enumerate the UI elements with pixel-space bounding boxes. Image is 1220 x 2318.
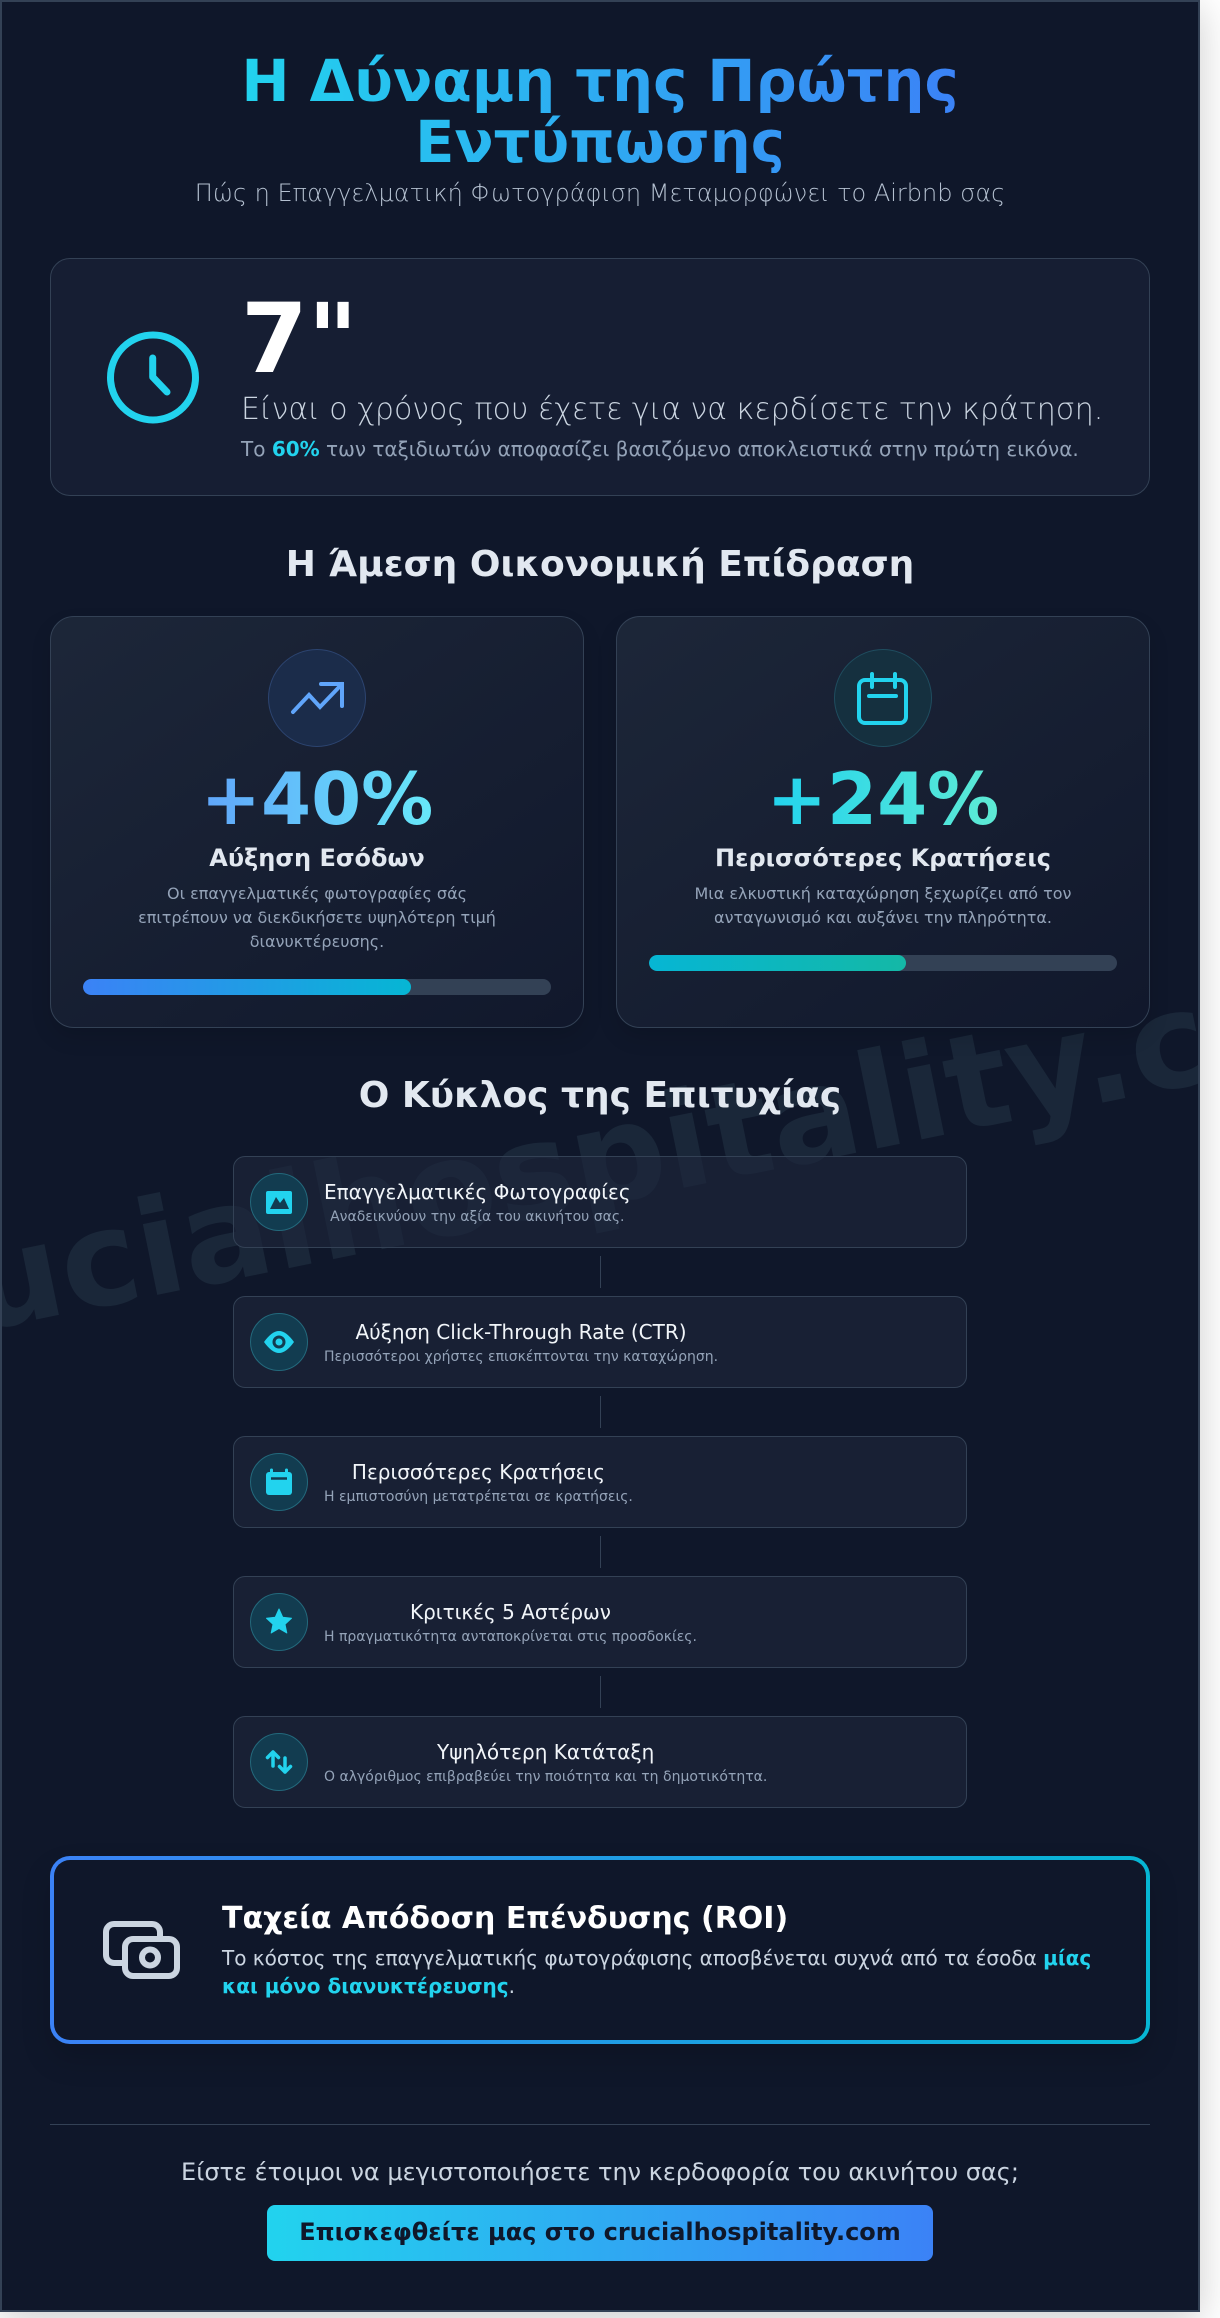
ROI description: Το κόστος της επαγγελματικής φωτογράφισης αποσβένεται συχνά από τα έσοδα μίας — [222, 1946, 1091, 1970]
big number: 7" — [241, 283, 358, 395]
call to action button: Επισκεφθείτε μας στο crucialhospitality.com — [299, 2218, 901, 2246]
step 5 text: Υψηλότερη Κατάταξη — [437, 1740, 654, 1764]
subtitle: Πώς η Επαγγελματική Φωτογράφιση Μεταμορφώνει το Airbnb σας — [195, 179, 1005, 207]
divider — [50, 2124, 1150, 2125]
heading: economic impact: Η Άμεση Οικονομική Επίδραση — [286, 544, 914, 585]
progress bar — [649, 955, 1117, 971]
step 5 icon: arrows — [250, 1733, 308, 1791]
ROI description: και μόνο διανυκτέρευσης. — [222, 1974, 515, 1998]
step 4 text: Η πραγματικότητα ανταποκρίνεται στις προσδοκίες. — [324, 1629, 697, 1645]
step 1 text — [324, 1180, 631, 1225]
label: Αύξηση Εσόδων — [209, 844, 425, 872]
step 1 icon: image — [250, 1173, 308, 1231]
step 1 card — [233, 1156, 967, 1248]
step 1 text: Αναδεικνύουν την αξία του ακινήτου σας. — [330, 1209, 624, 1225]
supporting text: Το 60% των ταξιδιωτών αποφασίζει βασιζόμενο αποκλειστικά στην πρώτη εικόνα. — [241, 437, 1079, 461]
description — [138, 884, 496, 951]
step 2 text: Περισσότεροι χρήστες επισκέπτονται την καταχώρηση. — [324, 1349, 718, 1365]
step 5 text: Ο αλγόριθμος επιβραβεύει την ποιότητα και τη δημοτικότητα. — [324, 1769, 767, 1785]
description: Οι επαγγελματικές φωτογραφίες σάς — [167, 884, 467, 903]
description: επιτρέπουν να διεκδικήσετε υψηλότερη τιμή — [138, 908, 496, 927]
description: Μια ελκυστική καταχώρηση ξεχωρίζει από τον — [694, 884, 1072, 903]
stat: +40%: +40% — [201, 757, 433, 841]
title: Η Δύναμη της Πρώτης — [241, 48, 959, 115]
step 4 text — [324, 1600, 697, 1645]
step 5 card — [233, 1716, 967, 1808]
description — [694, 884, 1072, 927]
panel: bookings — [616, 616, 1150, 1028]
step 3 card — [233, 1436, 967, 1528]
step 3 icon: calendar — [250, 1453, 308, 1511]
icon: calendar — [834, 649, 932, 747]
label: Περισσότερες Κρατήσεις — [715, 844, 1051, 872]
step 5 text — [324, 1740, 767, 1785]
call to action button — [267, 2205, 933, 2261]
panel: ROI — [50, 1856, 1150, 2044]
progress bar — [83, 979, 551, 995]
heading: success cycle: Ο Κύκλος της Επιτυχίας — [359, 1075, 841, 1116]
step 2 card — [233, 1296, 967, 1388]
step 2 text: Αύξηση Click-Through Rate (CTR) — [356, 1320, 687, 1344]
step 4 card — [233, 1576, 967, 1668]
inner surface — [54, 1860, 1146, 2040]
icon: trend up — [268, 649, 366, 747]
connector — [600, 1536, 601, 1568]
ROI title: Ταχεία Απόδοση Επένδυσης (ROI) — [222, 1901, 788, 1936]
connector — [600, 1676, 601, 1708]
step 2 icon: eye — [250, 1313, 308, 1371]
title: Εντύπωσης — [415, 109, 785, 176]
step 3 text — [324, 1460, 633, 1505]
ROI description — [222, 1946, 1091, 1998]
step 4 icon: star — [250, 1593, 308, 1651]
description: ανταγωνισμό και αυξάνει την πληρότητα. — [714, 908, 1052, 927]
panel: revenue — [50, 616, 584, 1028]
step 3 text: Περισσότερες Κρατήσεις — [352, 1460, 605, 1484]
step 2 text — [324, 1320, 718, 1365]
stat: +24%: +24% — [767, 757, 999, 841]
description: διανυκτέρευσης. — [250, 932, 384, 951]
call to action question: Είστε έτοιμοι να μεγιστοποιήσετε την κερδοφορία του ακινήτου σας; — [181, 2158, 1019, 2186]
statement: Είναι ο χρόνος που έχετε για να κερδίσετε την κράτηση. — [241, 392, 1103, 427]
icon: money — [103, 1921, 180, 1979]
connector — [600, 1256, 601, 1288]
step 3 text: Η εμπιστοσύνη μετατρέπεται σε κρατήσεις. — [324, 1489, 633, 1505]
connector — [600, 1396, 601, 1428]
step 1 text: Επαγγελματικές Φωτογραφίες — [324, 1180, 631, 1204]
step 4 text: Κριτικές 5 Αστέρων — [410, 1600, 611, 1624]
panel: seven seconds — [50, 258, 1150, 496]
icon: clock — [107, 332, 199, 424]
title — [240, 51, 960, 173]
